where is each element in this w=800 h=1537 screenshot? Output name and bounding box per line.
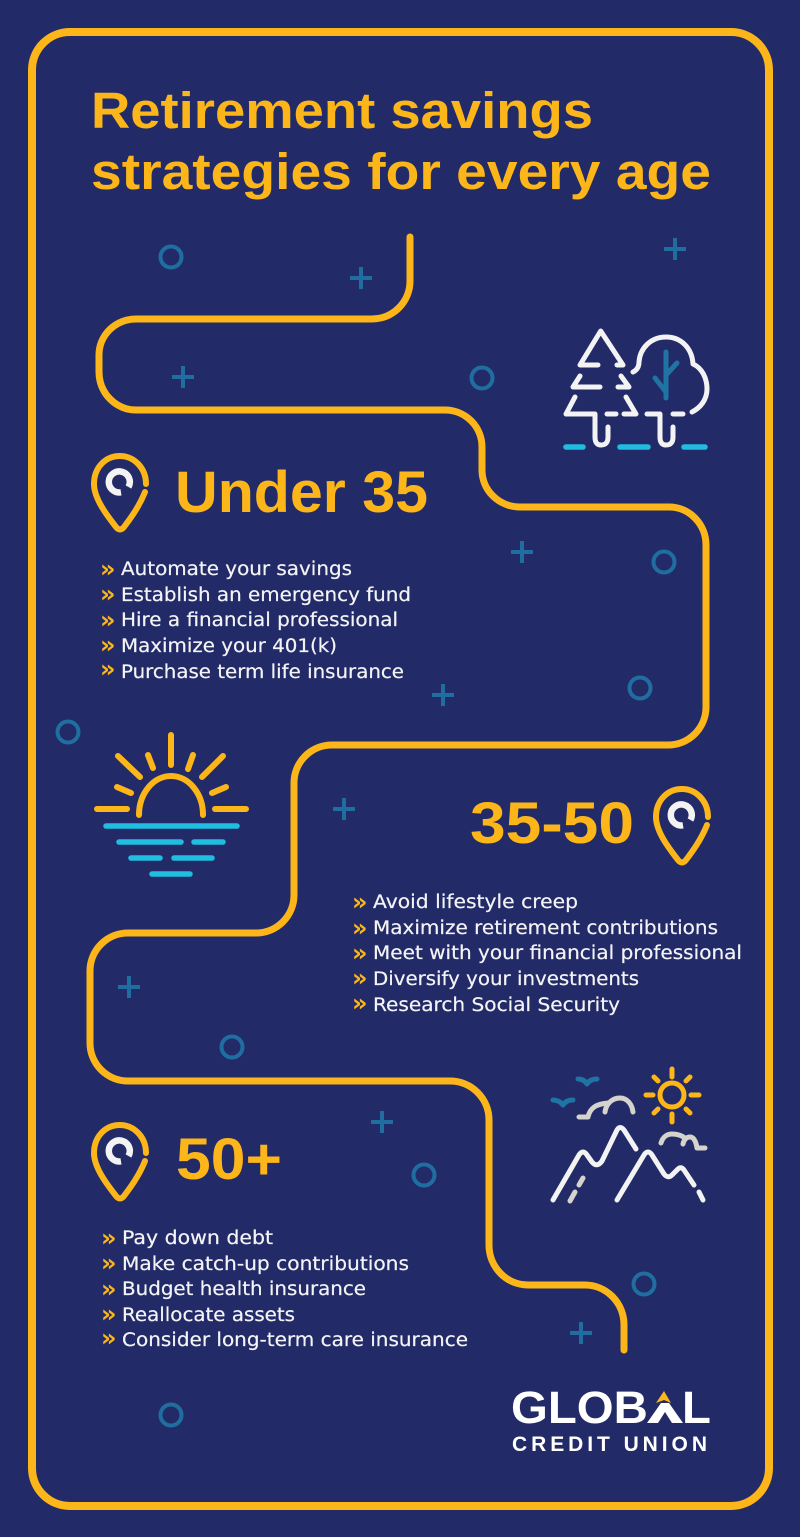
list: 35-50: » — [352, 939, 368, 967]
winding road path — [90, 237, 706, 1350]
list: under 35: » — [100, 606, 116, 634]
list: 35-50: » — [352, 888, 368, 916]
pin: 35-50 — [656, 789, 708, 862]
list: under 35: Hire a financial professional — [121, 610, 398, 631]
list: under 35: » — [100, 631, 116, 659]
list: under 35: » — [100, 555, 116, 583]
list: 50+: Pay down debt — [122, 1228, 273, 1249]
list: under 35 — [100, 555, 411, 683]
decorative circles and plus signs — [58, 238, 686, 1426]
list: 50+: Consider long-term care insurance — [122, 1330, 468, 1351]
list: 35-50: Avoid lifestyle creep — [373, 892, 578, 913]
logo: Global Credit Union: CREDIT UNION — [512, 1433, 707, 1456]
list: 35-50: Maximize retirement contributions — [373, 918, 718, 939]
list: 50+: » — [101, 1300, 117, 1328]
title: strategies for every age — [91, 143, 711, 200]
title: Retirement savings — [91, 82, 593, 139]
icon: trees — [566, 331, 707, 447]
list: 50+: » — [101, 1275, 117, 1303]
list: under 35: Purchase term life insurance — [121, 662, 404, 683]
list: under 35: Establish an emergency fund — [121, 585, 411, 606]
icon: mountains — [553, 1069, 705, 1201]
logo: Global Credit Union: GLOBAL — [511, 1382, 711, 1433]
pin: under 35 — [94, 456, 146, 530]
list: 35-50: Diversify your investments — [373, 969, 639, 990]
list: 35-50: » — [352, 964, 368, 992]
list: under 35: Automate your savings — [121, 559, 352, 580]
list: 50+: Make catch-up contributions — [122, 1254, 409, 1275]
list: 50+: Reallocate assets — [122, 1305, 295, 1326]
heading: 50+: 50+ — [176, 1127, 282, 1192]
list: 50+: » — [101, 1324, 117, 1352]
list: under 35: » — [100, 655, 116, 683]
list: under 35: » — [100, 580, 116, 608]
list: 35-50: Meet with your financial professional — [373, 943, 742, 964]
list: 50+ — [101, 1224, 468, 1352]
list: 50+: Budget health insurance — [122, 1279, 366, 1300]
heading: 35-50: 35-50 — [470, 791, 634, 856]
pin: 50+ — [94, 1125, 146, 1198]
heading: Under 35: Under 35 — [175, 460, 428, 525]
title — [91, 82, 711, 200]
list: 35-50 — [352, 888, 742, 1017]
list: 35-50: Research Social Security — [373, 995, 620, 1016]
logo: Global Credit Union — [511, 1382, 711, 1456]
list: 50+: » — [101, 1224, 117, 1252]
list: 50+: » — [101, 1249, 117, 1277]
icon: sunset — [97, 735, 246, 874]
list: 35-50: » — [352, 989, 368, 1017]
list: 35-50: » — [352, 914, 368, 942]
list: under 35: Maximize your 401(k) — [121, 636, 337, 657]
